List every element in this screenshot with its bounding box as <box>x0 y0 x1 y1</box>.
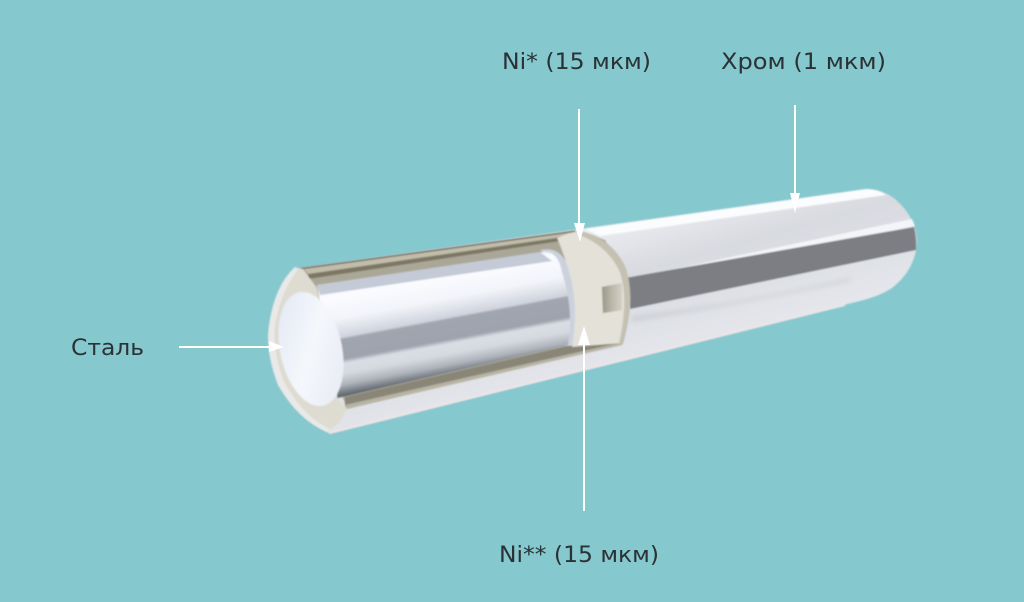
label: Ni*: Ni* (15 мкм) <box>502 50 651 75</box>
arrow: steel <box>179 341 284 352</box>
label: Ni**: Ni** (15 мкм) <box>499 543 659 568</box>
steel rod diagram <box>268 189 917 434</box>
label: chrome: Хром (1 мкм) <box>721 50 886 75</box>
chrome outer shell <box>275 189 917 434</box>
arrow: chrome <box>790 105 800 213</box>
end cap: outer ring <box>268 267 347 432</box>
end cap: steel core face <box>269 286 353 412</box>
arrow: Ni** <box>578 326 590 511</box>
cutaway: inner nickel layer <box>300 230 630 409</box>
arrow: Ni* <box>574 109 585 242</box>
second nickel core cylinder <box>317 252 570 399</box>
collar window <box>602 283 622 313</box>
cutaway: light collar <box>540 231 630 347</box>
label: steel: Сталь <box>71 336 144 361</box>
